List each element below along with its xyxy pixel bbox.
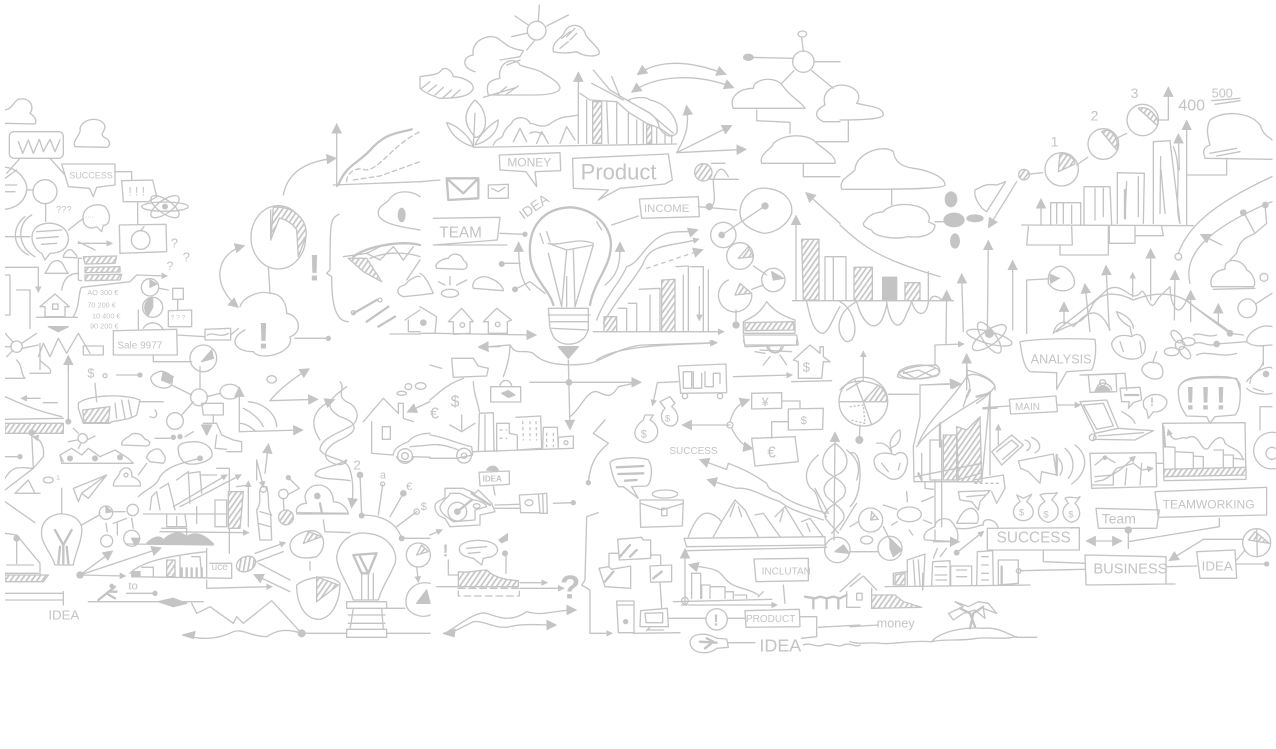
bar row xyxy=(130,548,232,578)
connector xyxy=(935,344,963,365)
pie 1: 1 xyxy=(1051,134,1059,150)
arrow and pie hint xyxy=(840,352,995,390)
money bags: $ xyxy=(1019,508,1025,518)
house xyxy=(363,383,430,455)
idea box xyxy=(479,466,509,495)
radial dots xyxy=(357,469,430,541)
bridge xyxy=(343,243,420,282)
palm island xyxy=(850,602,1037,644)
line chart xyxy=(333,125,420,187)
house dollar xyxy=(792,345,832,382)
cloud small xyxy=(398,276,420,297)
panel: lower centre doodles xyxy=(430,340,860,656)
graph upper left xyxy=(5,360,71,433)
mountain ridge xyxy=(183,601,430,638)
bar row: uce xyxy=(212,562,228,573)
pie far right xyxy=(1237,529,1271,560)
line links xyxy=(1016,518,1219,573)
teamworking box: TEAMWORKING xyxy=(1163,497,1255,511)
briefcase large xyxy=(640,490,683,527)
apple xyxy=(874,430,908,479)
analysis bubble: ANALYSIS xyxy=(1031,352,1092,366)
bars with base blocks xyxy=(1022,122,1193,255)
interlaced waves xyxy=(1053,250,1243,336)
small boxes: ? ? ? xyxy=(171,314,186,321)
four circles xyxy=(99,504,140,547)
small chart box xyxy=(1090,453,1157,488)
business box: BUSINESS xyxy=(1093,561,1168,577)
step blocks xyxy=(202,403,242,452)
arrow to chart xyxy=(283,158,335,195)
computer xyxy=(617,601,706,633)
sale box xyxy=(113,328,238,355)
pie 2 xyxy=(1088,108,1127,159)
speech near chart xyxy=(958,475,1005,510)
product box: PRODUCT xyxy=(746,614,795,625)
car xyxy=(430,435,473,463)
idea label: IDEA xyxy=(48,607,80,622)
mountains tray xyxy=(684,500,827,551)
lower arrows xyxy=(480,343,715,360)
symbols: $ xyxy=(451,394,460,411)
pie bottom xyxy=(153,345,217,372)
dollar and disk chart: $ xyxy=(87,366,94,380)
exclamation cloud xyxy=(235,292,328,356)
ground line xyxy=(473,144,677,147)
lower cloud xyxy=(863,205,935,238)
growth arrows xyxy=(267,369,317,401)
flower and waves xyxy=(1164,326,1272,383)
blob with arrow xyxy=(138,442,212,497)
cloud cluster xyxy=(924,508,998,558)
exclamation box xyxy=(115,172,157,223)
exclamation and brace xyxy=(308,214,348,322)
idea box right: IDEA xyxy=(1202,559,1233,574)
price list: 70 200 € xyxy=(87,300,116,309)
money bags: $ xyxy=(641,428,648,440)
bushes xyxy=(493,115,578,145)
up arrows left xyxy=(946,242,1013,343)
bar chart small xyxy=(673,550,777,605)
house part xyxy=(390,310,420,334)
speech small xyxy=(1120,387,1167,418)
money bags: $ xyxy=(665,414,671,424)
question bubble: ??? xyxy=(56,205,72,215)
atom xyxy=(142,192,188,222)
big question mark: ? xyxy=(560,569,580,606)
sale box: Sale 9977 xyxy=(117,340,163,351)
sun xyxy=(5,333,38,357)
teamworking box xyxy=(1155,487,1267,517)
pie 3: 3 xyxy=(1131,85,1139,101)
numbers 400 500 xyxy=(1178,86,1240,115)
waves xyxy=(443,610,575,637)
city xyxy=(430,413,573,458)
curved road xyxy=(1175,177,1272,283)
hatched bars xyxy=(62,256,122,290)
price list: AO 300 € xyxy=(87,288,118,297)
megaphone xyxy=(1018,445,1085,484)
idea text: IDEA xyxy=(516,190,552,222)
team box: TEAM xyxy=(439,224,482,241)
success box: SUCCESS xyxy=(997,530,1071,547)
question bubble xyxy=(56,205,109,232)
dna tree xyxy=(806,433,859,540)
exclamation speech xyxy=(430,530,507,573)
exclamation and brace: ! xyxy=(308,248,321,289)
main box xyxy=(983,396,1080,414)
dollar and disk chart xyxy=(78,366,163,423)
small clouds and sun xyxy=(420,254,503,297)
cloud with dot xyxy=(296,457,361,533)
sun xyxy=(512,5,568,50)
exclamation box: ! ! ! xyxy=(128,184,145,198)
business box xyxy=(1085,555,1175,585)
shoe xyxy=(897,365,940,379)
currency tree: $ xyxy=(801,415,808,427)
dense chart xyxy=(913,360,997,527)
mountain zigzag xyxy=(38,333,103,369)
sun cake bottom xyxy=(743,340,797,365)
exclamation cloud: ! xyxy=(257,315,270,356)
small cloud right xyxy=(1211,261,1272,318)
small pies xyxy=(138,279,168,330)
triangle: 1 xyxy=(56,473,60,482)
cloud top left xyxy=(5,99,36,124)
speech with lines xyxy=(610,458,651,498)
inclusion sign xyxy=(754,558,811,603)
atom xyxy=(965,319,1013,357)
leaf network xyxy=(592,70,677,136)
speech small: ! xyxy=(1150,395,1154,409)
panel: upper left doodles xyxy=(5,99,420,372)
question marks: ? xyxy=(171,235,178,250)
small cloud xyxy=(935,182,1006,222)
envelopes xyxy=(420,178,508,200)
small pies xyxy=(718,243,785,328)
apple xyxy=(1112,312,1145,359)
winding arrow xyxy=(430,343,717,377)
left pie xyxy=(5,167,33,209)
bar chart right xyxy=(793,193,840,333)
team box xyxy=(433,217,525,245)
panel: top centre doodles xyxy=(420,5,840,360)
product box xyxy=(573,154,672,200)
pies right xyxy=(387,543,430,616)
network nodes xyxy=(151,367,240,429)
arrow frame xyxy=(239,388,302,432)
pie 2: 2 xyxy=(1091,108,1099,124)
laptop xyxy=(1080,400,1153,441)
cloud hatched xyxy=(553,25,599,56)
machine box xyxy=(678,364,792,399)
cloud with dot: 2 xyxy=(353,457,361,472)
cloud and flow arrows xyxy=(5,261,68,328)
left edge mask xyxy=(0,0,5,749)
cloud with question xyxy=(378,192,420,230)
money box xyxy=(499,153,561,187)
curved arrows xyxy=(633,63,733,92)
hatched circle graph xyxy=(695,163,738,207)
bubble top xyxy=(1178,378,1240,390)
lantern xyxy=(257,445,272,540)
pie connections xyxy=(850,453,902,560)
inclusion sign: INCLUTAN xyxy=(762,566,811,577)
question marks: ? xyxy=(167,259,174,273)
exclamation bubble xyxy=(1178,376,1240,423)
node xyxy=(744,31,840,88)
success box xyxy=(987,528,1079,550)
panel: upper right doodles xyxy=(839,85,1272,390)
money label xyxy=(850,617,915,631)
bulb big lower xyxy=(337,533,396,637)
success speech box: SUCCESS xyxy=(69,171,113,181)
hatched ellipse and arrows xyxy=(207,543,290,592)
chart left with bars xyxy=(839,225,953,342)
top cloud xyxy=(840,85,883,142)
mountain left xyxy=(5,533,48,582)
exclamation bubble: !!! xyxy=(1185,380,1231,416)
gear machine xyxy=(435,488,573,527)
sideways bulb xyxy=(690,634,860,656)
buildings xyxy=(885,551,1030,590)
symbols: € xyxy=(430,405,439,422)
bars cluster xyxy=(143,468,248,553)
house dollar: $ xyxy=(803,360,811,375)
cloud with arrow xyxy=(74,119,110,147)
brace xyxy=(582,513,612,633)
income box xyxy=(612,197,737,225)
radial dots: a xyxy=(380,469,386,481)
house edge xyxy=(840,573,860,607)
numbers 400 500: 500 xyxy=(1212,86,1233,100)
folder xyxy=(452,358,488,377)
round node and speech bubble xyxy=(5,180,68,260)
bottom house xyxy=(850,576,922,608)
double arrow xyxy=(1087,539,1121,543)
layered cake mountain xyxy=(743,302,798,353)
big pie xyxy=(251,206,306,293)
bars up chart xyxy=(593,266,723,332)
main box: MAIN xyxy=(1015,402,1040,413)
wavy growth xyxy=(597,230,702,323)
doodle sun xyxy=(883,492,933,535)
folders xyxy=(599,537,672,608)
cloud chain xyxy=(113,449,165,486)
money bags xyxy=(635,382,678,443)
money label: money xyxy=(877,617,915,631)
small circle chain xyxy=(279,476,299,525)
arrows to bulb xyxy=(499,243,545,293)
price list xyxy=(73,275,167,331)
success speech box xyxy=(7,158,115,197)
question marks xyxy=(167,235,190,273)
DNA helix xyxy=(314,382,357,507)
shoe xyxy=(437,560,563,596)
pie 3 xyxy=(1127,85,1168,136)
team box: Team xyxy=(1102,510,1136,526)
idea box right xyxy=(1166,539,1267,578)
bar chart falling xyxy=(578,73,672,143)
cloud and dotted line xyxy=(122,432,193,446)
arrow bundle xyxy=(677,107,745,153)
hatched node and arrow xyxy=(989,169,1043,227)
wrenches xyxy=(351,298,395,327)
people box xyxy=(9,132,63,158)
exclamation circle xyxy=(706,609,745,630)
price list: 10 400 € xyxy=(92,311,121,320)
product box xyxy=(745,609,860,638)
briefcase xyxy=(491,380,521,402)
symbols xyxy=(430,394,475,432)
runner xyxy=(88,580,203,607)
mounds xyxy=(127,507,248,545)
runner: to xyxy=(128,580,138,592)
money bags xyxy=(1013,493,1080,522)
apple box xyxy=(119,224,167,253)
flower petals xyxy=(944,192,983,248)
triangle xyxy=(15,473,60,493)
radial dots: $ xyxy=(421,501,428,513)
plant leaves xyxy=(447,100,498,147)
cloud upper xyxy=(465,37,523,72)
phone xyxy=(992,425,1040,465)
cloud top right xyxy=(1187,114,1272,175)
house xyxy=(37,294,77,332)
houses row xyxy=(420,307,535,335)
dots chain xyxy=(588,420,608,483)
person box xyxy=(1082,373,1127,390)
money box: MONEY xyxy=(507,156,551,170)
pie small xyxy=(825,537,860,563)
right edge shapes xyxy=(1247,360,1276,469)
idea label xyxy=(5,592,80,622)
box with circle xyxy=(1027,266,1074,333)
person box xyxy=(1080,374,1117,392)
panel: lower left doodles xyxy=(5,360,430,638)
question marks: ? xyxy=(183,250,190,265)
pie lower xyxy=(290,531,340,619)
team box xyxy=(1096,508,1159,528)
cloud centre xyxy=(483,60,560,97)
curves to folder xyxy=(430,378,479,412)
big pie xyxy=(839,377,918,443)
people xyxy=(805,595,847,608)
double arrow xyxy=(78,242,112,250)
panel: lower right doodles xyxy=(839,360,1276,644)
numbers 400 500: 400 xyxy=(1178,98,1205,115)
money bags: $ xyxy=(1043,509,1049,519)
currency tree: € xyxy=(767,444,776,461)
exclamation speech: ! xyxy=(443,541,448,561)
vertical link left xyxy=(5,430,44,490)
cloud hatched left xyxy=(420,69,473,98)
small cloud xyxy=(63,250,77,258)
paper plane xyxy=(73,475,107,502)
currency tree xyxy=(683,393,823,466)
cloud right node xyxy=(732,79,840,177)
shoe xyxy=(898,365,939,379)
connected circles xyxy=(711,188,792,248)
big light bulb xyxy=(530,207,611,358)
product box: Product xyxy=(581,159,656,184)
success text: SUCCESS xyxy=(669,446,718,457)
wavy arrows xyxy=(701,460,827,520)
bulb small xyxy=(5,488,100,565)
small sun and houses xyxy=(60,428,133,463)
analysis bubble xyxy=(1020,339,1096,389)
arrow up xyxy=(66,357,70,370)
big cloud xyxy=(841,149,945,205)
question bubble: .... xyxy=(85,210,94,219)
income box: INCOME xyxy=(644,203,690,215)
small boxes xyxy=(168,288,192,327)
curved double arrow xyxy=(220,246,243,307)
sideways bulb: IDEA xyxy=(759,636,801,656)
pie 1 xyxy=(1045,134,1088,186)
axis cross xyxy=(530,360,640,428)
small apple xyxy=(1142,352,1163,379)
currency tree: ¥ xyxy=(761,396,770,410)
fan arrows xyxy=(77,548,160,578)
right chart xyxy=(1156,423,1246,481)
money bags: $ xyxy=(1068,509,1074,519)
radial dots: € xyxy=(406,481,413,493)
car xyxy=(393,433,430,463)
idea box: IDEA xyxy=(483,475,502,484)
price list: 90 200 € xyxy=(90,322,119,331)
exclamation circle: ! xyxy=(713,612,719,629)
